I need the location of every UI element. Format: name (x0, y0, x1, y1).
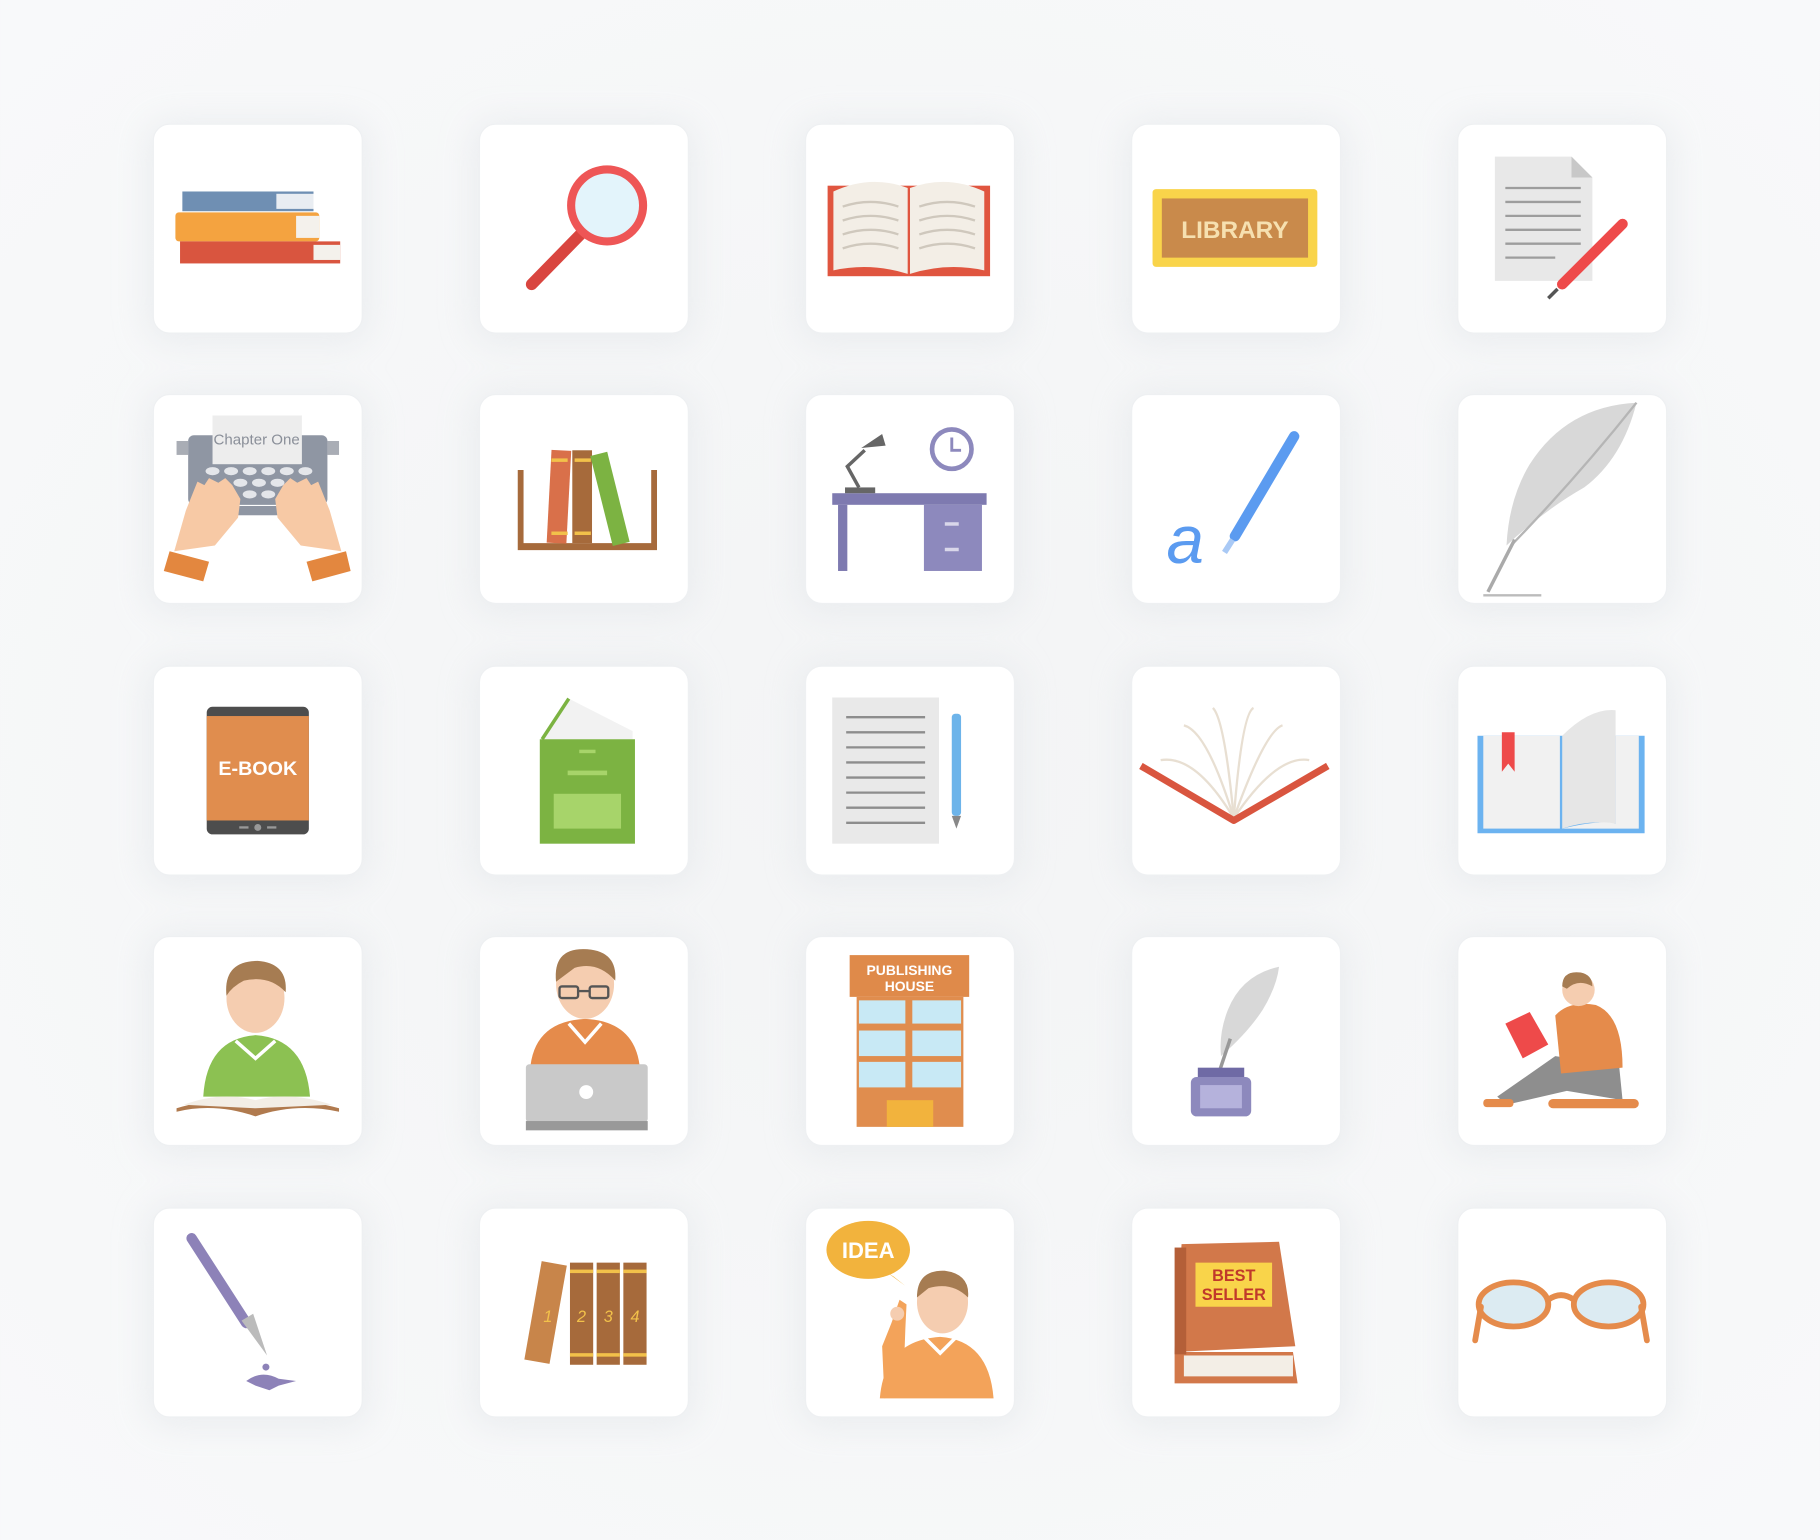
icon: idea person (826, 1221, 994, 1398)
icon: feather quill (1483, 403, 1636, 595)
icon: handwriting pen (1166, 436, 1294, 578)
icon: document with pencil (1495, 157, 1623, 298)
icon: open book (828, 182, 990, 276)
icon: library sign (1153, 189, 1317, 267)
icon: inkwell and quill (1191, 967, 1279, 1116)
icon: document and pencil (832, 697, 961, 844)
icon: numbered book series: 1 (543, 1308, 552, 1326)
icon: e-book (207, 707, 309, 834)
icon: typewriter with hands: Chapter One (213, 431, 300, 448)
icon: numbered book series: 3 (604, 1308, 613, 1326)
icon: typewriter with hands (164, 415, 351, 581)
icon: glasses (1475, 1282, 1647, 1340)
icon: library sign: LIBRARY (1181, 217, 1289, 244)
icon: bestseller book: SELLER (1202, 1286, 1266, 1304)
icon: open blue book with bookmark (1477, 710, 1645, 833)
tile shadows (146, 121, 1674, 1427)
icon: desk with lamp and clock (832, 429, 987, 571)
icon: bookshelf (518, 450, 657, 550)
icon: person with laptop (526, 949, 648, 1130)
icon: open book V (1141, 708, 1328, 820)
icon: idea person: IDEA (842, 1238, 895, 1263)
icon: publishing house building: PUBLISHING (867, 962, 952, 978)
icon: publishing house building: HOUSE (885, 978, 934, 994)
icon: fountain pen with ink (192, 1238, 296, 1390)
icon: stack of books (175, 191, 340, 263)
icon: person sitting reading (1483, 972, 1639, 1108)
icon: bestseller book: BEST (1212, 1267, 1256, 1285)
icon: handwriting pen: a (1166, 503, 1204, 578)
icon: publishing house building (850, 955, 969, 1127)
icon: green book (540, 699, 635, 844)
icon: bestseller book (1175, 1242, 1298, 1383)
icon: numbered book series: 4 (630, 1308, 639, 1326)
icon: person reading book (177, 961, 339, 1116)
icon: magnifier (532, 169, 643, 284)
icon: numbered book series (524, 1261, 647, 1365)
icon: e-book: E-BOOK (218, 758, 298, 780)
icon: numbered book series: 2 (576, 1308, 586, 1326)
